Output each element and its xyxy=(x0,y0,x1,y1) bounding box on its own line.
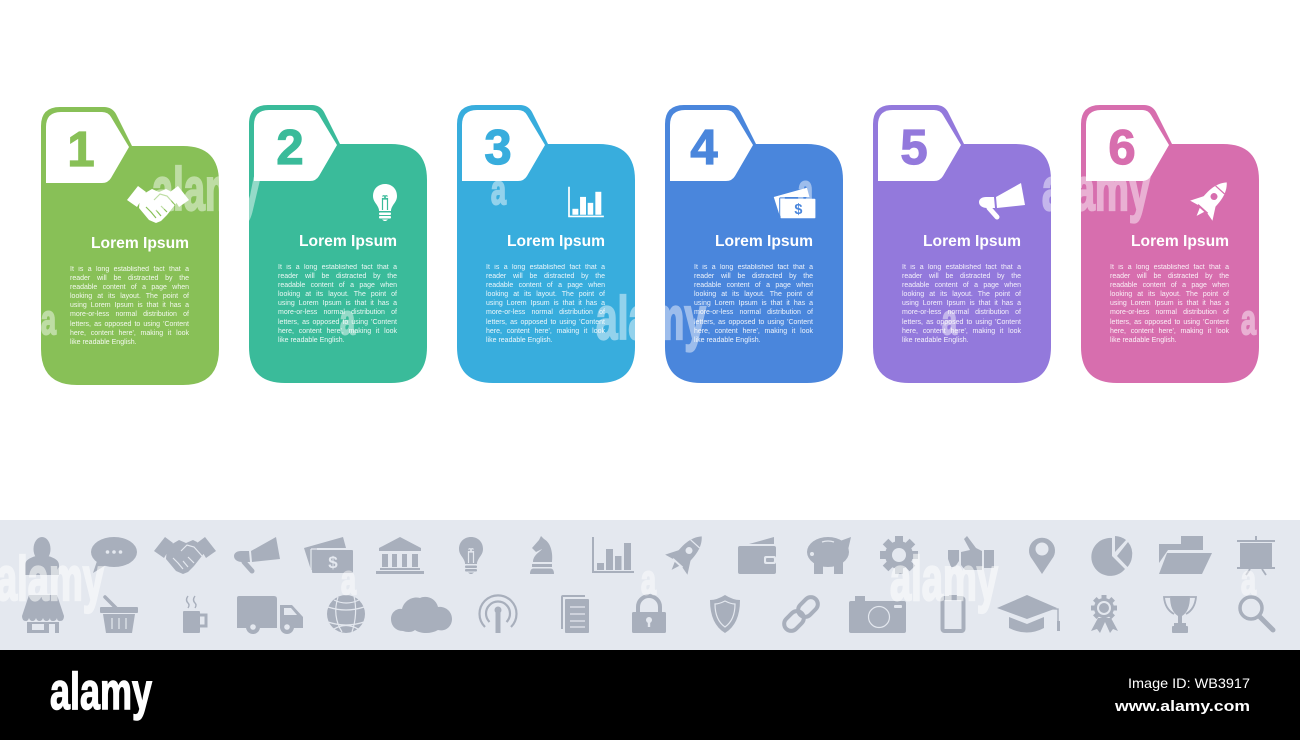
card 2 number tab xyxy=(254,110,337,181)
card 6 body text: more-or-less normal distribution of xyxy=(1110,309,1229,316)
card 5 body text: using Lorem Ipsum is that it has a xyxy=(902,300,1021,307)
card 1 body text: readable content of a page when xyxy=(70,284,189,291)
card 3 body text: like readable English. xyxy=(486,337,553,344)
card 3 body text: using Lorem Ipsum is that it has a xyxy=(486,300,605,307)
card 3 body text: letters, as opposed to using 'Content xyxy=(486,319,605,326)
stock watermarks: a xyxy=(491,166,506,213)
stock watermarks: a xyxy=(341,556,356,603)
panel: card 6 xyxy=(1081,105,1259,383)
icon: chess knight xyxy=(530,536,554,574)
card 6 body text: like readable English. xyxy=(1110,337,1177,344)
panel: icon strip xyxy=(0,520,1300,650)
card 5 number: 5 xyxy=(900,121,928,175)
icon: handshake xyxy=(127,186,189,223)
panel: card 4 xyxy=(665,105,843,383)
card 5 body text xyxy=(902,262,1024,348)
icon: wallet xyxy=(738,537,776,574)
card 4 body text: like readable English. xyxy=(694,337,761,344)
icon: megaphone xyxy=(234,537,280,571)
card 5 body text: It is a long established fact that a xyxy=(902,264,1021,270)
card 4 body text: here, content here', making it look xyxy=(694,328,813,335)
card 1 body text: using Lorem Ipsum is that it has a xyxy=(70,302,189,309)
card 5 body text: here, content here', making it look xyxy=(902,328,1021,335)
card 1 body text: like readable English. xyxy=(70,339,137,346)
icon: pie chart xyxy=(1091,536,1132,576)
card 5 body text: like readable English. xyxy=(902,337,969,344)
stock watermarks: alamy xyxy=(890,545,998,614)
icon: globe xyxy=(327,595,365,633)
icon: handshake xyxy=(154,537,216,574)
card 1 body text: looking at its layout. The point of xyxy=(70,293,189,300)
card 3 body text: more-or-less normal distribution of xyxy=(486,309,605,316)
card 2 body text: looking at its layout. The point of xyxy=(278,291,397,298)
card 5 number tab xyxy=(878,110,961,181)
card 2 body text: readable content of a page when xyxy=(278,282,397,289)
icon: shield xyxy=(710,595,740,633)
icon: shop xyxy=(22,595,64,633)
icon strip background xyxy=(0,520,1300,650)
icon: light bulb xyxy=(459,537,483,574)
stock watermarks: alamy xyxy=(596,285,706,352)
card 5 body text: more-or-less normal distribution of xyxy=(902,309,1021,316)
card 1 number: 1 xyxy=(67,123,95,177)
stock watermarks: a xyxy=(1241,556,1256,603)
card 6 number tab xyxy=(1086,110,1169,181)
stock watermarks: a xyxy=(641,556,656,603)
stock watermarks: a xyxy=(798,166,813,213)
icon: cloud xyxy=(391,597,452,633)
website url: www.alamy.com xyxy=(1114,698,1250,715)
card 4 body text: more-or-less normal distribution of xyxy=(694,309,813,316)
card 5 body text: reader will be distracted by the xyxy=(902,273,1021,280)
icon: rocket xyxy=(1185,172,1238,226)
card 3 shape xyxy=(457,105,635,383)
icon: folder xyxy=(1159,536,1212,574)
card 6 body text: using Lorem Ipsum is that it has a xyxy=(1110,300,1229,307)
card 4 body text: It is a long established fact that a xyxy=(694,264,813,270)
icon: tablet xyxy=(942,595,964,631)
card 4 body text: using Lorem Ipsum is that it has a xyxy=(694,300,813,307)
card 5 body text: readable content of a page when xyxy=(902,282,1021,289)
panel: card 1 xyxy=(41,107,219,385)
card 3 number: 3 xyxy=(484,121,512,175)
card 4 body text: reader will be distracted by the xyxy=(694,273,813,280)
icon: bank xyxy=(376,537,424,574)
card 6 body text: looking at its layout. The point of xyxy=(1110,291,1229,298)
card 2 shape xyxy=(249,105,427,383)
card 2 body text: more-or-less normal distribution of xyxy=(278,309,397,316)
icon: speech bubble xyxy=(91,537,137,573)
card 3 body text: readable content of a page when xyxy=(486,282,605,289)
card 1 body text xyxy=(70,264,192,350)
card 6 body text: letters, as opposed to using 'Content xyxy=(1110,319,1229,326)
card 3 body text: It is a long established fact that a xyxy=(486,264,605,270)
icon: gear xyxy=(880,536,918,574)
card 5 body text: looking at its layout. The point of xyxy=(902,291,1021,298)
icon: broadcast signal xyxy=(480,595,516,633)
card 2 heading: Lorem Ipsum xyxy=(299,233,397,250)
stock watermarks: alamy xyxy=(0,545,104,614)
card 2 body text: reader will be distracted by the xyxy=(278,273,397,280)
card 1 body text: It is a long established fact that a xyxy=(70,266,189,272)
icon: map pin xyxy=(1029,538,1055,574)
card 6 body text: readable content of a page when xyxy=(1110,282,1229,289)
icon: megaphone xyxy=(979,183,1025,217)
card 1 heading: Lorem Ipsum xyxy=(91,235,189,252)
card 4 number: 4 xyxy=(690,121,718,175)
stock watermarks: a xyxy=(1241,296,1256,343)
icon: bar chart xyxy=(569,187,604,216)
icon: graduation cap xyxy=(997,595,1060,632)
card 2 body text: like readable English. xyxy=(278,337,345,344)
icon: padlock xyxy=(632,596,666,633)
card 1 body text: here, content here', making it look xyxy=(70,330,189,337)
card 5 body text: letters, as opposed to using 'Content xyxy=(902,319,1021,326)
card 2 body text xyxy=(278,262,400,348)
card 6 body text: It is a long established fact that a xyxy=(1110,264,1229,270)
card 1 number tab xyxy=(46,112,129,183)
card 5 shape xyxy=(873,105,1051,383)
icon: magnifier xyxy=(1240,597,1273,630)
icon: rocket xyxy=(660,526,713,580)
footer logo: alamy xyxy=(50,663,152,721)
card 6 heading: Lorem Ipsum xyxy=(1131,233,1229,250)
card 3 body text: here, content here', making it look xyxy=(486,328,605,335)
image id: Image ID: WB3917 xyxy=(1128,675,1250,691)
card 6 number: 6 xyxy=(1108,121,1136,175)
card 3 body text: looking at its layout. The point of xyxy=(486,291,605,298)
card 4 shape xyxy=(665,105,843,383)
card 6 shape xyxy=(1081,105,1259,383)
icon: trophy xyxy=(1164,596,1196,633)
card 3 heading: Lorem Ipsum xyxy=(507,233,605,250)
card 4 body text: letters, as opposed to using 'Content xyxy=(694,319,813,326)
stock watermarks: a xyxy=(41,296,56,343)
card 4 number tab xyxy=(670,110,753,181)
icon: light bulb xyxy=(373,184,397,221)
card 1 shape xyxy=(41,107,219,385)
card 2 body text: It is a long established fact that a xyxy=(278,264,397,270)
stock watermarks: a xyxy=(942,296,957,343)
icon: chain link xyxy=(781,594,821,634)
panel: card 3 xyxy=(457,105,635,383)
stock watermarks: alamy xyxy=(1042,156,1150,223)
card 1 body text: reader will be distracted by the xyxy=(70,275,189,282)
stock watermarks: alamy xyxy=(152,156,260,223)
card 4 heading: Lorem Ipsum xyxy=(715,233,813,250)
icon: bar chart xyxy=(593,537,634,572)
card 5 heading: Lorem Ipsum xyxy=(923,233,1021,250)
card 6 body text: here, content here', making it look xyxy=(1110,328,1229,335)
icon: banknotes xyxy=(774,188,815,218)
icon: steaming cup xyxy=(183,596,206,633)
icon: person xyxy=(25,537,59,575)
card 3 body text: reader will be distracted by the xyxy=(486,273,605,280)
card 2 body text: here, content here', making it look xyxy=(278,328,397,335)
card 4 body text: looking at its layout. The point of xyxy=(694,291,813,298)
card 1 body text: letters, as opposed to using 'Content xyxy=(70,321,189,328)
icon: presentation board xyxy=(1237,536,1275,575)
icon: delivery truck xyxy=(237,596,303,634)
card 6 body text xyxy=(1110,262,1232,348)
stock watermarks: a xyxy=(340,296,355,343)
panel: card 5 xyxy=(873,105,1051,383)
icon: award ribbon xyxy=(1091,595,1118,633)
card 4 body text xyxy=(694,262,816,348)
icon: thumbs up xyxy=(948,536,994,570)
card 3 body text xyxy=(486,262,608,348)
icon: camera xyxy=(849,596,906,633)
icon: document xyxy=(562,596,589,633)
footer bar xyxy=(0,650,1300,740)
icon: shopping basket xyxy=(100,597,138,633)
card 2 body text: using Lorem Ipsum is that it has a xyxy=(278,300,397,307)
stock watermarks xyxy=(0,156,1256,614)
panel: card 2 xyxy=(249,105,427,383)
icon: piggy bank xyxy=(807,537,851,574)
card 3 number tab xyxy=(462,110,545,181)
card 4 body text: readable content of a page when xyxy=(694,282,813,289)
card 6 body text: reader will be distracted by the xyxy=(1110,273,1229,280)
card 1 body text: more-or-less normal distribution of xyxy=(70,311,189,318)
card 2 body text: letters, as opposed to using 'Content xyxy=(278,319,397,326)
icon: banknotes xyxy=(304,537,353,573)
card 2 number: 2 xyxy=(276,121,304,175)
